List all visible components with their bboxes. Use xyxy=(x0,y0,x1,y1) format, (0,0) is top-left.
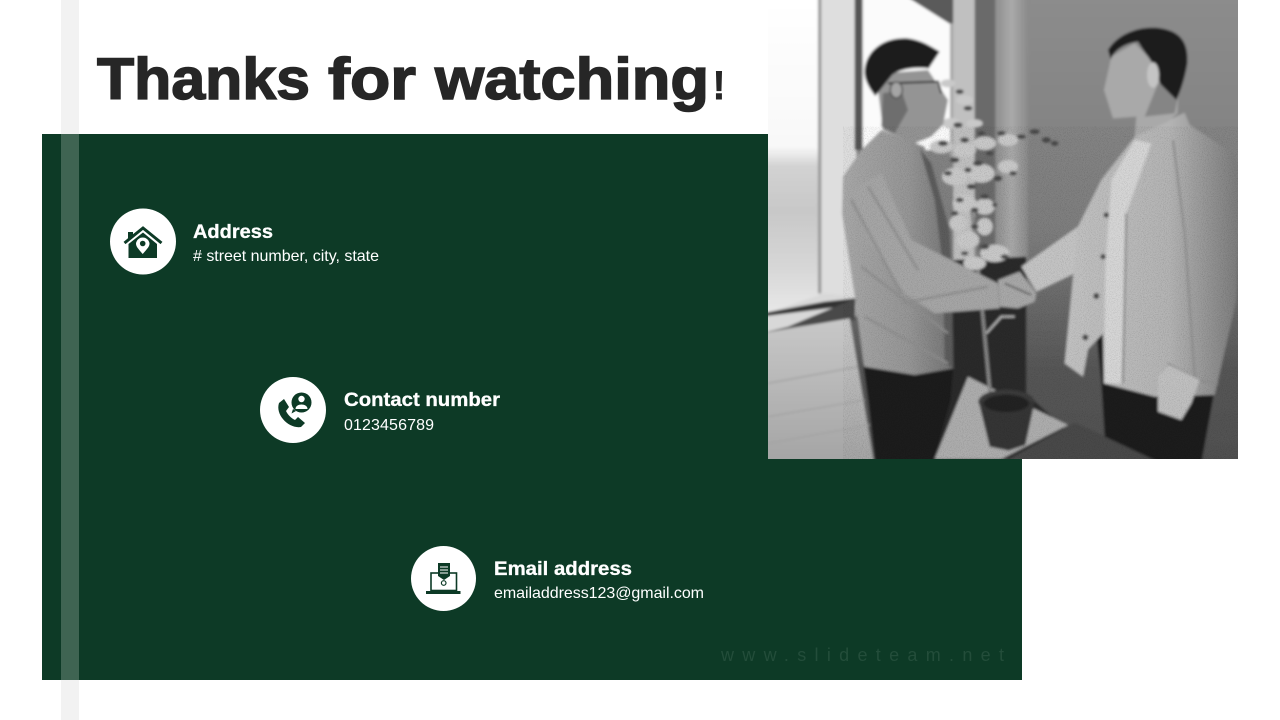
contact item: email xyxy=(411,546,704,611)
background strip xyxy=(61,0,79,720)
text: email: emailaddress123@gmail.com xyxy=(494,585,704,602)
heading: contact number: Contact number xyxy=(344,390,501,411)
text: street: # street number, city, state xyxy=(193,248,379,265)
title: ! xyxy=(713,64,725,108)
heading: address: Address xyxy=(193,222,273,243)
icon: phone with contact bubble xyxy=(260,377,326,443)
text: phone number: 0123456789 xyxy=(344,417,434,434)
icon: house with location pin xyxy=(110,208,176,274)
contact item: address xyxy=(110,208,379,274)
title: Thanks xyxy=(97,47,310,112)
title: watching xyxy=(434,47,709,112)
title xyxy=(97,47,725,112)
watermark: www.slideteam.net xyxy=(720,645,1004,665)
panel: green contact panel xyxy=(42,134,1022,680)
contact item: phone xyxy=(260,377,501,443)
photo: two men shaking hands xyxy=(768,0,1238,459)
title: for xyxy=(328,47,416,112)
heading: email address: Email address xyxy=(494,559,632,580)
icon: laptop with document xyxy=(411,546,476,611)
